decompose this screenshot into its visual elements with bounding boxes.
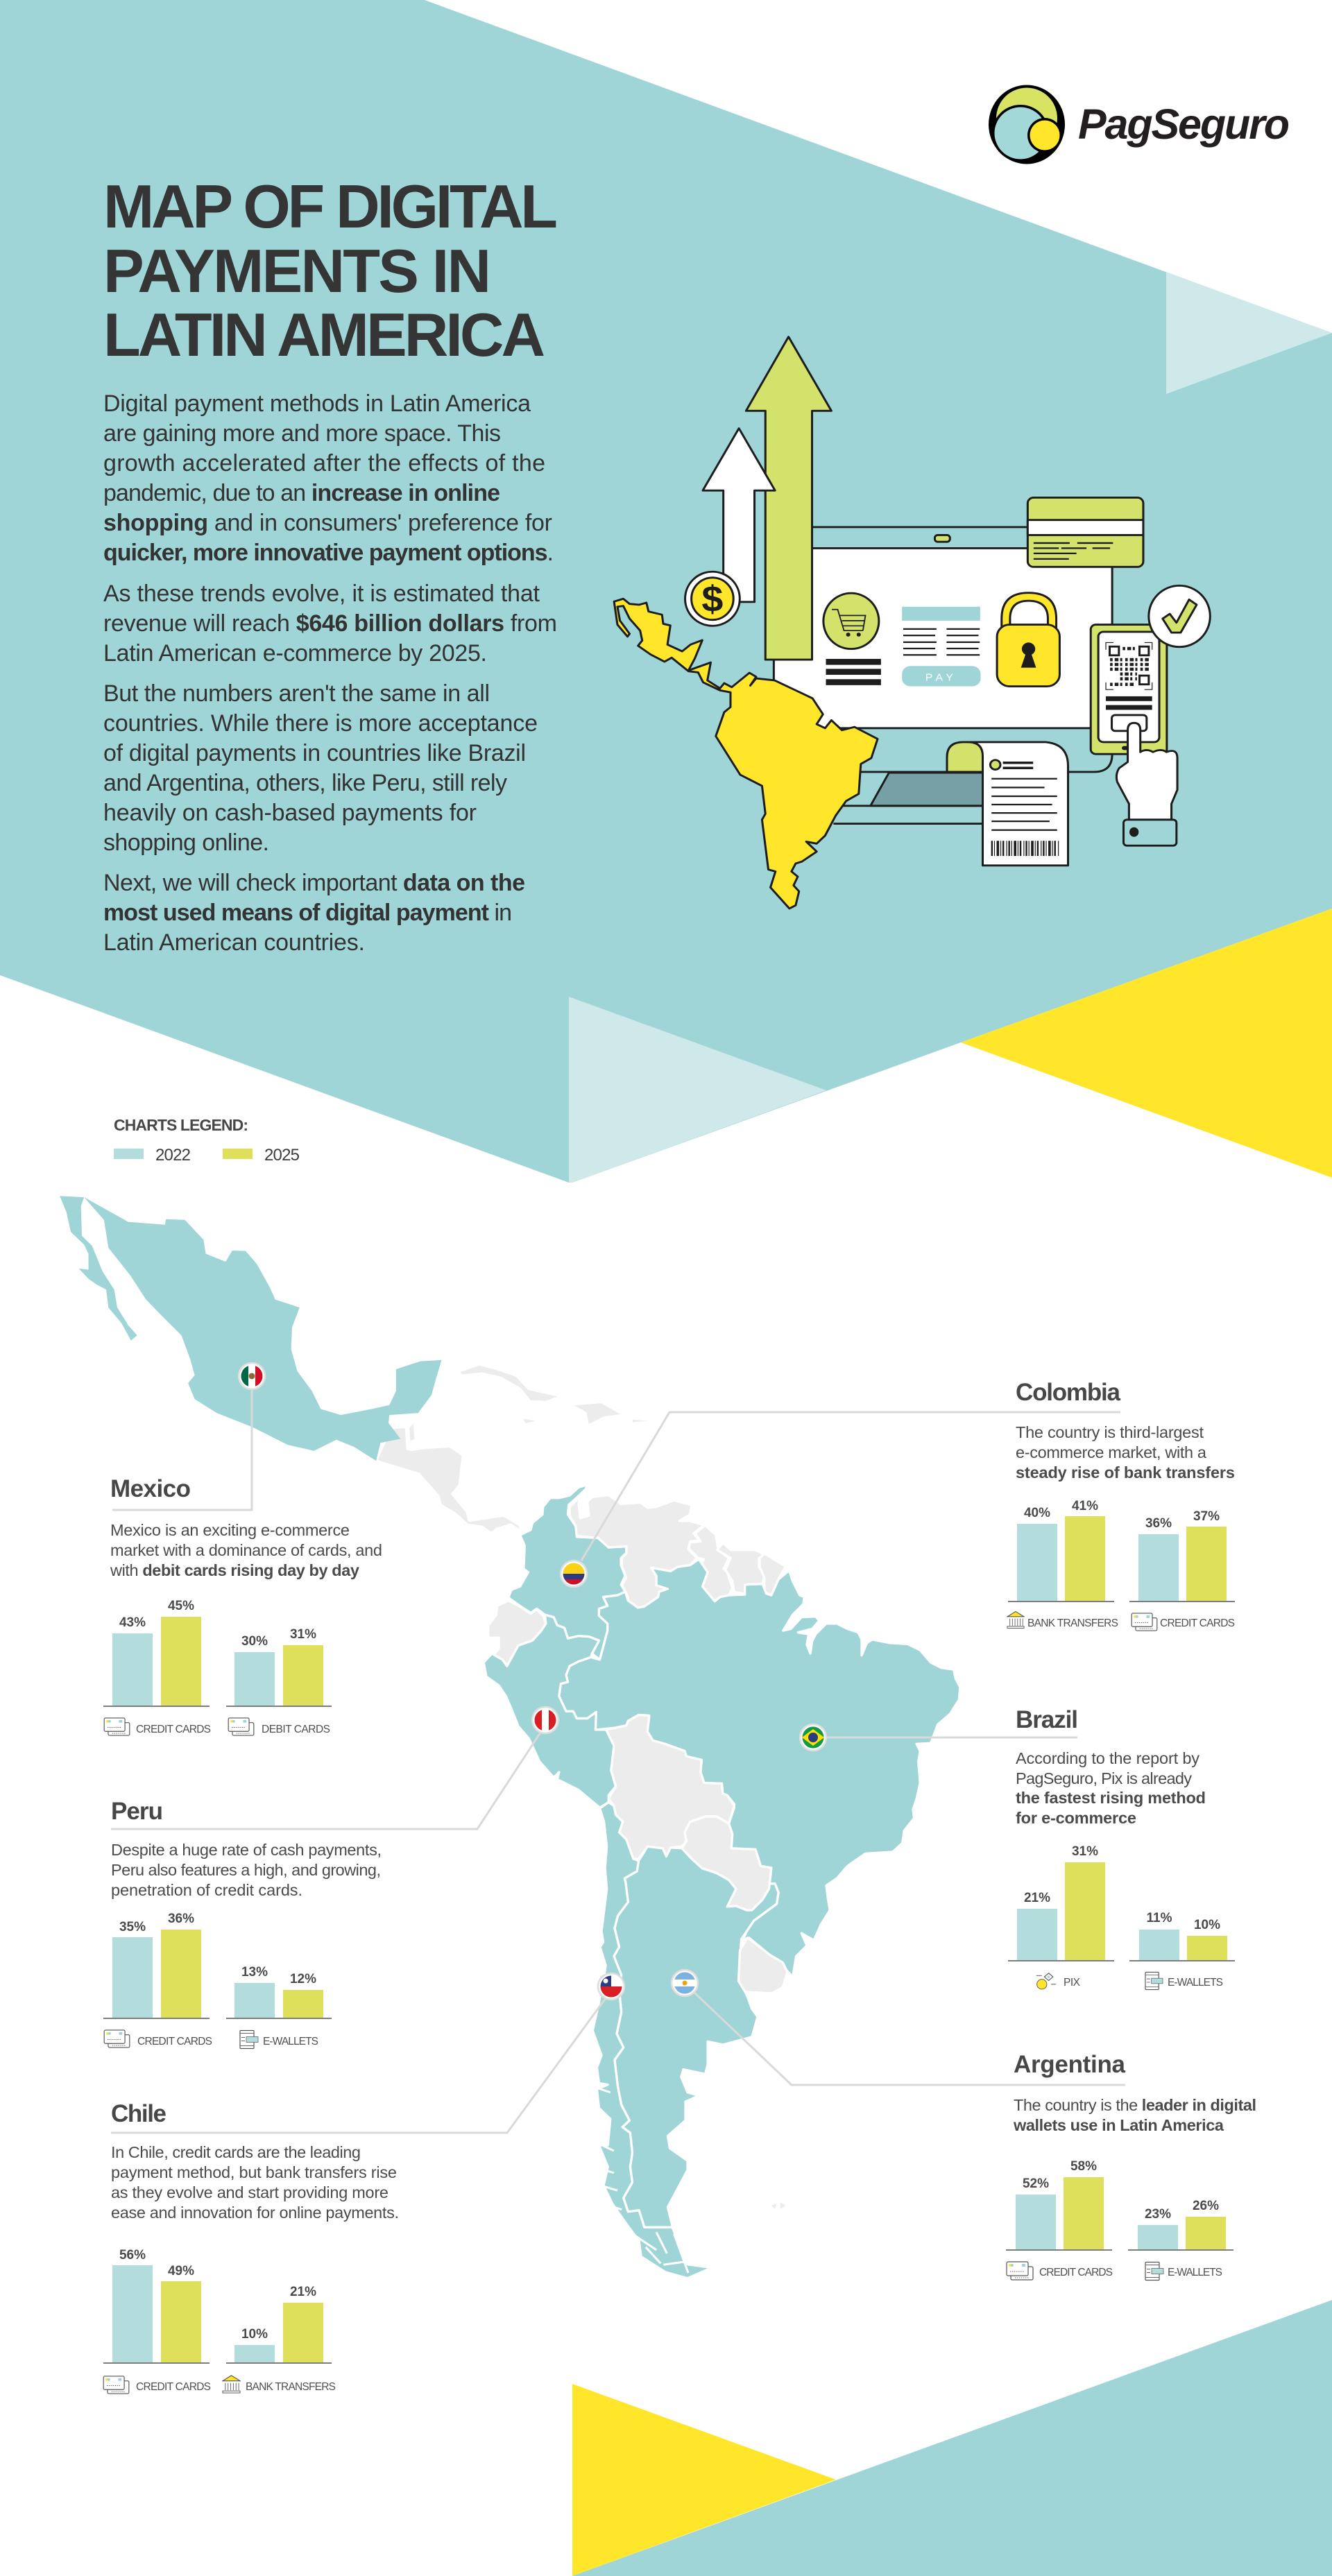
bar chart: Argentina e-wallets: 23% [1145,2207,1171,2222]
description: Colombia: steady rise of bank transfers [1016,1463,1235,1482]
bar chart: Brazil e-wallets: 10% [1194,1918,1220,1932]
intro text block: and Argentina, others, like Peru, still rely [103,770,507,796]
bar chart: Colombia credit cards: CREDIT CARDS [1160,1617,1235,1629]
green arrow [746,337,831,660]
description: Chile: ease and innovation for online payments. [111,2204,399,2222]
pay form: PAY [925,672,957,683]
map: South America [484,1485,960,2278]
bar chart: Chile bank transfers: 21% [290,2285,316,2299]
bar chart: Peru e-wallets: E-WALLETS [263,2036,318,2047]
intro text block: Next, we will check important data on the [103,870,525,896]
map: Mexico [60,1196,442,1461]
flag: Colombia [561,1561,587,1587]
bar chart: Mexico debit cards: 31% [290,1627,316,1642]
description: Mexico: Mexico is an exciting e-commerce [110,1521,350,1539]
description: Colombia [1016,1423,1235,1482]
description: Peru: Despite a huge rate of cash payments, [111,1841,382,1859]
description: Brazil: According to the report by [1016,1749,1199,1767]
bar chart: Mexico debit cards: 30% [241,1634,268,1649]
intro text block: As these trends evolve, it is estimated that [103,581,540,607]
bar chart: Chile bank transfers: BANK TRANSFERS [246,2381,336,2393]
intro text block: quicker, more innovative payment options. [103,540,554,566]
intro text block: pandemic, due to an increase in online [103,480,500,506]
description: Colombia: The country is third-largest [1016,1423,1204,1441]
intro text block: Latin American e-commerce by 2025. [103,640,487,667]
bar chart: Argentina credit cards: 52% [1023,2176,1049,2191]
description: Argentina [1013,2096,1256,2134]
bar chart: Mexico credit cards: 45% [168,1599,194,1613]
intro text block: are gaining more and more space. This [103,420,501,447]
bar chart: Peru e-wallets: 12% [290,1972,316,1986]
charts legend [114,1116,300,1165]
bar chart: Brazil e-wallets [1129,1911,1235,1990]
pay form [902,607,980,687]
heading: Brazil: Brazil [1016,1706,1078,1733]
top teal background shape [0,0,1332,1183]
logo: PagSeguro: PagSeguro [1078,101,1290,148]
intro text block: revenue will reach $646 billion dollars from [103,610,557,637]
grey countries [488,1495,785,2209]
bar chart: Colombia credit cards: 36% [1145,1516,1172,1531]
description: Argentina: The country is the leader in digital [1014,2096,1256,2114]
bar chart: Brazil Pix [1008,1844,1114,1989]
bar chart: Peru credit cards [103,1912,212,2047]
bar chart: Colombia credit cards: 37% [1193,1509,1220,1524]
title: MAP OF DIGITAL [103,172,558,241]
intro text block: But the numbers aren't the same in all [103,680,490,707]
map: Central America and Caribbean [376,1366,647,1534]
flag: Chile [598,1973,624,2000]
bar chart: Chile bank transfers: 10% [241,2327,268,2342]
hand [1116,723,1177,845]
charts legend: 2022 [155,1146,191,1165]
panel: Argentina [1006,2051,1256,2281]
intro text block: shopping and in consumers' preference for [103,510,552,536]
bar chart: Argentina e-wallets: 26% [1193,2199,1219,2213]
bar chart: Mexico credit cards [103,1599,211,1735]
description: Mexico: with debit cards rising day by day [110,1561,359,1579]
intro text block: of digital payments in countries like Brazil [103,740,526,766]
Colombia [509,1485,626,1660]
flag: Mexico [239,1363,265,1389]
Brazil [559,1559,960,1977]
intro text block: Latin American countries. [103,929,365,956]
bar chart: Brazil e-wallets: 11% [1147,1911,1172,1925]
panel: Brazil [1008,1706,1235,1990]
description: Mexico [110,1521,382,1579]
intro text block: shopping online. [103,830,269,856]
bar chart: Peru e-wallets [226,1965,332,2049]
panel: Mexico [103,1475,382,1735]
logo: PagSeguro [989,85,1290,164]
bar chart: Colombia bank transfers [1007,1499,1118,1629]
flag: Peru [532,1707,558,1733]
description: Brazil: for e-commerce [1016,1809,1136,1827]
bar chart: Argentina credit cards [1006,2159,1113,2280]
description: Chile [111,2143,399,2222]
yellow map of Latin America [614,599,878,909]
flag: Argentina [672,1970,698,1996]
bar chart: Brazil Pix: PIX [1064,1977,1081,1989]
white arrow [703,429,775,602]
heading: Mexico: Mexico [110,1475,191,1502]
panel: Chile [103,2100,399,2394]
bar chart: Colombia credit cards [1129,1509,1235,1631]
description: Chile: as they evolve and start providing more [111,2183,388,2201]
bar chart: Chile credit cards: 56% [119,2248,146,2262]
description: Brazil: the fastest rising method [1016,1789,1206,1807]
bar chart: Colombia bank transfers: 41% [1072,1499,1098,1513]
title: PAYMENTS IN [103,237,491,305]
coin [685,572,740,626]
bar chart: Chile credit cards [103,2248,211,2394]
description: Brazil [1016,1749,1206,1827]
coin: $ [701,578,723,619]
title: LATIN AMERICA [103,300,545,369]
bar chart: Mexico credit cards: 43% [119,1615,146,1630]
description: Brazil: PagSeguro, Pix is already [1016,1769,1192,1787]
panel: Colombia [1007,1379,1235,1631]
description: Peru [111,1841,382,1899]
description: Colombia: e-commerce market, with a [1016,1443,1207,1461]
bar chart: Mexico credit cards: CREDIT CARDS [136,1724,211,1735]
credit card [1027,497,1143,567]
Argentina [614,1846,778,2227]
bar chart: Argentina credit cards: 58% [1070,2159,1097,2174]
heading: Colombia: Colombia [1016,1379,1121,1406]
description: Peru: penetration of credit cards. [111,1881,302,1899]
bar chart: Argentina e-wallets [1128,2199,1233,2281]
bar chart: Colombia bank transfers: BANK TRANSFERS [1027,1617,1118,1629]
description: Argentina: wallets use in Latin America [1013,2116,1224,2134]
yellow triangle right [961,909,1332,1178]
shopping cart badge [823,593,881,685]
intro text block: Digital payment methods in Latin America [103,390,531,417]
hero illustration [614,337,1210,909]
bar chart: Brazil Pix: 31% [1072,1844,1098,1859]
bar chart: Peru credit cards: 35% [119,1920,146,1934]
bar chart: Argentina credit cards: CREDIT CARDS [1039,2267,1113,2278]
bar chart: Mexico debit cards: DEBIT CARDS [262,1724,330,1735]
heading: Peru: Peru [111,1798,163,1825]
intro text block: most used means of digital payment in [103,900,512,926]
intro text block: countries. While there is more acceptance [103,710,538,737]
charts legend: 2025 [264,1146,300,1165]
pale triangle lower centre [569,997,826,1183]
description: Peru: Peru also features a high, and growing, [111,1861,381,1879]
intro text block [103,390,557,956]
monitor [774,527,1112,824]
bar chart: Chile credit cards: CREDIT CARDS [136,2381,211,2393]
Chile [592,1802,712,2278]
pale triangle upper right [1166,272,1332,394]
padlock [997,593,1059,687]
intro text block: growth accelerated after the effects of the [103,450,545,476]
heading: Argentina: Argentina [1014,2051,1126,2078]
leader lines [111,1390,1125,2133]
checkmark badge [1149,585,1210,647]
description: Mexico: market with a dominance of cards, and [110,1541,382,1559]
smartphone with QR [1091,625,1167,754]
bar chart: Brazil e-wallets: E-WALLETS [1168,1977,1223,1989]
bar chart: Mexico debit cards [226,1627,332,1735]
description: Chile: In Chile, credit cards are the leading [111,2143,361,2161]
heading: Chile: Chile [111,2100,166,2127]
panel: Peru [103,1798,382,2049]
bar chart: Chile credit cards: 49% [168,2264,194,2278]
intro text block: heavily on cash-based payments for [103,800,477,826]
bar chart: Colombia bank transfers: 40% [1024,1506,1050,1520]
flag: Brazil [800,1724,826,1751]
receipt [968,742,1068,866]
bar chart: Peru credit cards: 36% [168,1912,194,1926]
bar chart: Brazil Pix: 21% [1024,1891,1050,1905]
charts legend: CHARTS LEGEND: [114,1116,248,1134]
bottom yellow triangle [572,2384,836,2576]
Uruguay [738,1938,787,1993]
bottom teal shape [572,2300,1332,2576]
title [103,172,558,369]
teal countries [484,1485,960,2278]
bar chart: Peru e-wallets: 13% [241,1965,268,1980]
bar chart: Chile bank transfers [223,2285,336,2393]
description: Chile: payment method, but bank transfers rise [111,2163,397,2181]
bar chart: Peru credit cards: CREDIT CARDS [137,2036,212,2047]
Peru [484,1615,615,1808]
bar chart: Argentina e-wallets: E-WALLETS [1168,2267,1222,2278]
